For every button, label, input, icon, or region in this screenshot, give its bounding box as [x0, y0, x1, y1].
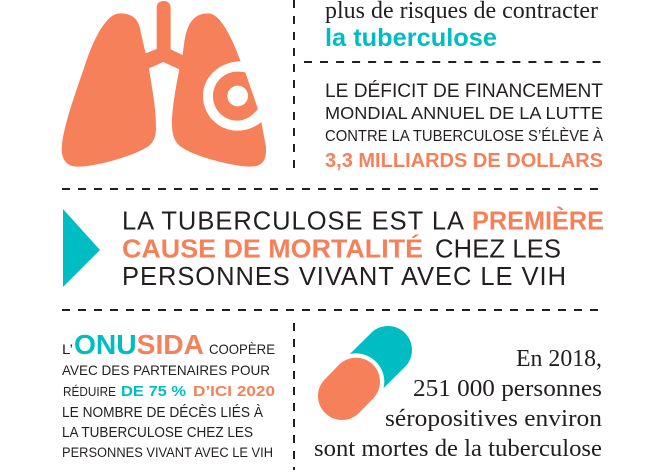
heading: leading cause of death: LA TUBERCULOSE EST LA — [122, 208, 464, 236]
text: ONUSIDA goal: L’ — [62, 341, 73, 357]
text: ONUSIDA goal: D’ICI 2020 — [193, 383, 275, 400]
text: ONUSIDA goal — [62, 329, 275, 460]
text: ONUSIDA goal: COOPÈRE — [209, 341, 275, 357]
text: ONUSIDA goal: PERSONNES VIVANT AVEC LE VIH — [62, 445, 273, 460]
text: ONUSIDA goal: AVEC DES PARTENAIRES POUR — [62, 362, 270, 378]
text: 2018 deaths statistic: sont mortes de la tuberculose — [314, 436, 602, 462]
text: 2018 deaths statistic: 251 000 personnes — [413, 376, 602, 402]
text: risk statement — [325, 0, 598, 52]
heading: leading cause of death — [122, 206, 604, 291]
text: funding gap: CONTRE LA TUBERCULOSE S’ÉLÈVE À — [325, 126, 603, 145]
text: ONUSIDA goal: LA TUBERCULOSE CHEZ LES — [62, 425, 253, 441]
heading: leading cause of death: PERSONNES VIVANT AVEC LE VIH — [122, 263, 566, 291]
text: funding gap: 3,3 MILLIARDS DE DOLLARS — [325, 150, 603, 172]
text: 2018 deaths statistic — [314, 346, 602, 462]
heading: leading cause of death: CAUSE DE MORTALITÉ — [122, 234, 423, 264]
text: funding gap: LE DÉFICIT DE FINANCEMENT — [325, 79, 603, 102]
text: 2018 deaths statistic: séropositives environ — [385, 406, 602, 432]
icon: pill capsule — [342, 350, 388, 396]
text: ONUSIDA goal: DE 75 % — [121, 383, 186, 400]
icon: teal triangle arrow — [63, 209, 100, 287]
text: funding gap: MONDIAL ANNUEL DE LA LUTTE — [325, 103, 603, 123]
icon: lungs — [62, 1, 266, 167]
text: ONUSIDA goal: LE NOMBRE DE DÉCÈS LIÉS À — [62, 404, 263, 421]
text: funding gap — [325, 79, 603, 172]
text: ONUSIDA goal: RÉDUIRE — [63, 384, 116, 399]
text: 2018 deaths statistic: En 2018, — [516, 346, 602, 372]
text: ONUSIDA goal: ONUSIDA — [74, 329, 204, 360]
heading: leading cause of death: CHEZ LES — [435, 236, 561, 264]
text: risk statement: la tuberculose — [325, 24, 497, 52]
heading: leading cause of death: PREMIÈRE — [472, 206, 604, 236]
